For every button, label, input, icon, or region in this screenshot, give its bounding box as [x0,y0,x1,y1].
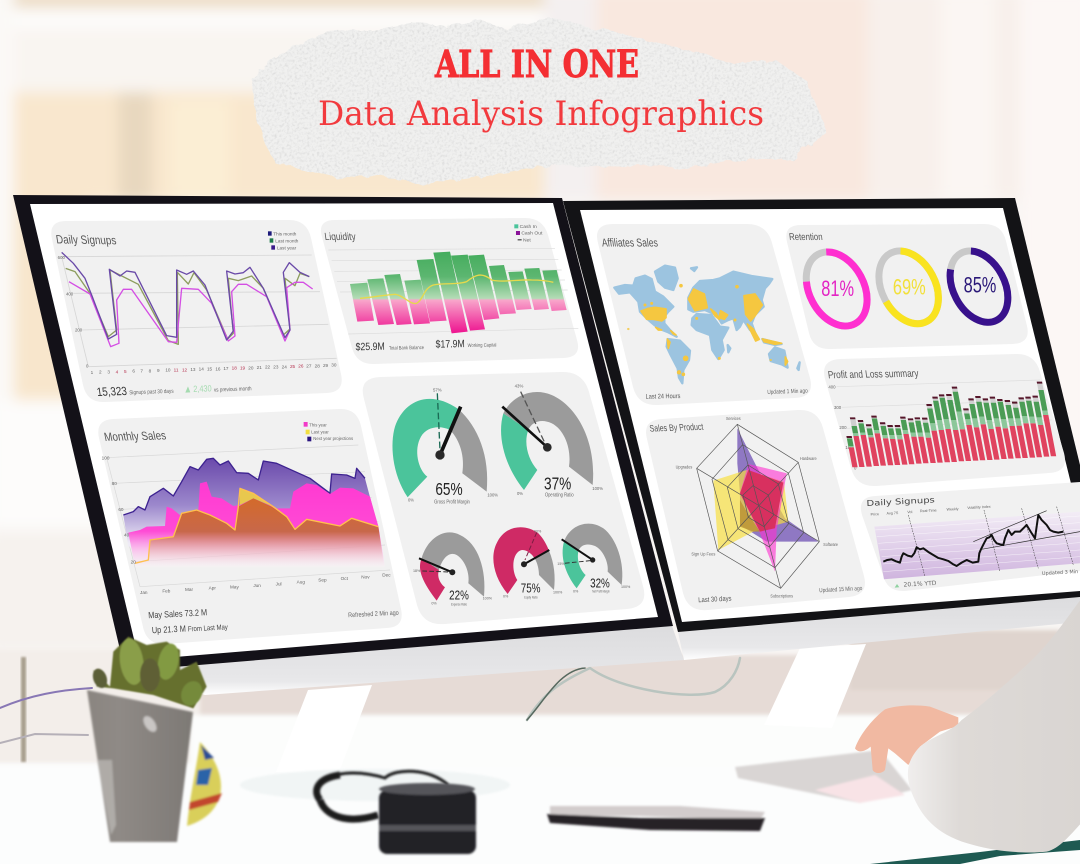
stock line chart [874,507,1080,579]
note: updated 1 min ago: Updated 1 Min ago [767,388,808,396]
area chart: monthly sales: Apr [209,586,216,591]
gauge: equity ratio [493,527,563,600]
gauge: gross profit margin: Gross Profit Margin [434,499,470,505]
line chart: daily signups: 5 [124,369,127,374]
stacked bar chart: 0 [854,465,857,470]
area chart: monthly sales: Sep [318,578,327,583]
legend: monthly sales [304,422,354,441]
line chart: daily signups: 3 [107,369,110,374]
title line one: ALL IN ONE [434,42,639,86]
gauge: net profit margin: Net Profit Margin [592,590,610,594]
line chart: daily signups: 13 [190,367,196,372]
donut: 81 percent: 81% [821,277,854,302]
line chart: daily signups: 16 [215,366,221,371]
line chart: daily signups: 2 [99,370,102,375]
panel: profit and loss summary [824,354,1065,486]
gauge: operating ratio [501,384,603,499]
phone [547,806,765,831]
line chart: daily signups: 27 [306,363,312,368]
stat: working capital [436,338,496,351]
stat: total bank balance [356,341,424,354]
gauge: equity ratio: 0% [503,595,509,599]
gauge: gross profit margin: 65% [435,480,463,499]
left monitor chin [125,626,684,695]
gauge: operating ratio: 100% [592,486,603,492]
legend: monthly sales: Last year [311,429,329,435]
gauge: operating ratio: 37% [544,475,571,494]
note: updated 3 min: Updated 3 Min [1042,569,1078,577]
area chart: monthly sales: Feb [162,589,171,594]
panel: gauges [363,372,644,624]
line chart: daily signups: 7 [140,368,143,373]
glasses [317,771,448,819]
stacked bar chart [828,380,1056,470]
line chart: daily signups: 12 [182,367,188,372]
header labels: Avg 7S [886,511,899,516]
legend: liquidity: Cash In [520,224,537,230]
header labels: Volatility Index [967,505,991,510]
area chart: monthly sales: Aug [297,579,305,584]
stat: signups past 30 days: 2,430 [193,384,212,394]
area chart: monthly sales: Dec [382,573,391,578]
keyboard [735,750,912,803]
line chart: daily signups: 6 [132,369,135,374]
monitor stands [240,644,866,801]
arm sleeve [908,598,1080,853]
panel: affiliates sales [597,224,811,405]
area chart: monthly sales: 20 [131,559,136,564]
line chart: daily signups: 29 [323,363,329,368]
heading: daily signups: Daily Signups [55,234,118,248]
cables [0,658,740,743]
line chart: daily signups: 8 [149,368,152,373]
gauge: net profit margin [557,524,631,594]
right monitor screen [580,208,1080,622]
stat: may sales [148,608,229,635]
donut: 85 percent: 85% [964,273,996,298]
line chart: daily signups: 9 [157,368,160,373]
line chart: daily signups: 0 [86,364,89,369]
area chart: monthly sales: May [230,584,239,589]
gauge: expense ratio: 100% [483,596,493,600]
gauge: operating ratio: 0% [517,491,523,497]
area chart: monthly sales: Nov [361,574,370,579]
header labels: Price [871,512,879,517]
legend: liquidity [514,224,543,243]
gauge: gross profit margin: 0% [408,498,414,504]
radar chart: Subscriptions [770,593,793,598]
header labels [871,505,991,517]
panel: sales by product [646,410,865,610]
panel: monthly sales [98,409,402,644]
panel: liquidity [321,218,578,364]
line chart: daily signups: 23 [273,364,279,369]
line chart: daily signups: 600 [58,255,65,260]
line chart: daily signups: 4 [116,369,119,374]
line chart: daily signups: 20 [248,365,254,370]
heading: affiliates sales: Affiliates Sales [601,238,659,250]
heading: profit and loss summary: Profit and Loss summary [827,368,920,382]
right monitor bezel [563,198,1080,632]
gauge: operating ratio: 43% [515,384,524,390]
line chart: daily signups: 19 [240,365,246,370]
stat: total bank balance: Total Bank Balance [389,345,424,351]
legend: daily signups: Last month [275,238,299,243]
line chart: daily signups: 28 [315,363,320,368]
desk edge [870,840,1080,864]
left monitor bezel [13,195,673,671]
stat: signups past 30 days: Signups past 30 days [129,388,174,396]
legend: monthly sales: Next year projections [313,436,354,441]
line chart: daily signups: 18 [232,366,237,371]
line chart: daily signups: 22 [265,365,271,370]
note: refreshed: Refreshed 2 Min ago [348,609,400,619]
stat: may sales: Up 21.3 M From Last May [152,622,229,635]
torn paper title banner [251,20,826,185]
gauge: net profit margin: 0% [573,589,579,593]
note: last 24 hours: Last 24 Hours [646,393,680,401]
radar chart [676,416,838,598]
line chart: daily signups [58,252,337,375]
heading: sales by product: Sales By Product [649,421,705,434]
area chart: monthly sales: Jan [140,590,148,595]
stat: signups past 30 days: 15,323 [96,385,128,399]
line chart: daily signups: 21 [257,365,262,370]
line chart: daily signups: 11 [174,367,179,372]
gauge: expense ratio [413,532,493,606]
gauge: net profit margin: 100% [621,585,631,589]
gauge: expense ratio: Expense Ratio [451,602,467,606]
radar chart: Hardware [800,456,817,461]
hand [855,705,958,773]
gauge: gross profit margin [392,387,498,505]
legend: liquidity: Net [523,237,531,243]
panel: retention [786,224,1028,349]
stat: year to date: 20.1% YTD [903,580,937,589]
line chart: daily signups: 24 [282,364,287,369]
note: last 30 days: Last 30 days [698,595,732,604]
plant: pot [87,690,193,842]
line chart: daily signups: 25 [290,364,296,369]
gauge: expense ratio: 18% [413,569,421,573]
stat: total bank balance: $25.9M [356,341,385,354]
radar chart: Sign Up Fees [691,551,715,556]
stat: may sales: May Sales 73.2 M [148,608,207,620]
panel: daily signups stock chart [861,482,1080,591]
line chart: daily signups: 200 [75,327,83,332]
stacked bar chart: 200 [839,425,847,430]
gauge: operating ratio: Operating Ratio [545,493,574,499]
radar chart: Software [823,542,838,547]
legend: daily signups: This month [273,231,297,236]
stat: signups past 30 days [96,384,252,399]
area chart: monthly sales: 100 [102,455,110,460]
legend: daily signups: Last year [277,245,297,250]
heading: retention: Retention [788,231,823,242]
stat: working capital: $17.9M [436,338,465,351]
stacked bar chart: 100 [845,445,853,450]
lens cylinder [379,783,476,854]
area chart: monthly sales: Oct [341,576,349,581]
gauge: expense ratio: 22% [449,589,469,603]
donut: 69 percent: 69% [893,275,926,300]
gauge: gross profit margin: 57% [433,387,442,393]
left monitor screen [30,203,658,660]
radar chart: Services [726,416,741,421]
radar chart: Upgrades [676,464,692,469]
area chart: monthly sales: Jul [276,581,282,586]
gauge: net profit margin: 15% [557,562,565,566]
area chart: monthly sales: 60 [118,507,124,512]
stacked bar chart: 400 [828,384,836,389]
line chart: daily signups: 17 [223,366,229,371]
patterned bag [187,742,222,826]
gauge: equity ratio: 75% [521,583,540,596]
panel: daily signups [51,220,342,402]
header labels: Vol [907,510,913,514]
right monitor chin [678,597,1080,660]
gauge: equity ratio: Equity Ratio [524,596,538,600]
gauge: equity ratio: 60% [534,530,542,534]
world map [614,266,800,383]
line chart: daily signups: 400 [66,291,74,296]
line chart: daily signups: 26 [298,364,304,369]
legend: liquidity: Cash Out [521,231,543,237]
title line two: Data Analysis Infographics [318,94,764,134]
area chart: monthly sales [102,445,391,595]
gauge: expense ratio: 0% [431,601,437,605]
line chart: daily signups: 1 [91,370,94,375]
line chart: daily signups: 10 [165,368,171,373]
stat: working capital: Working Capital [468,342,496,348]
header labels: Real-Time [920,508,937,513]
line chart: daily signups: 14 [199,367,204,372]
donut: 69 percent [867,241,950,334]
header labels: Weekly [946,507,959,512]
donut: 85 percent [938,241,1019,332]
bar chart: liquidity [328,248,578,334]
gauge: net profit margin: 32% [590,578,610,591]
donut: 81 percent [794,241,879,337]
stacked bar chart: 300 [834,405,842,410]
plant: leaves [90,637,207,709]
area chart: monthly sales: 80 [112,481,117,486]
area chart: monthly sales: Jun [253,583,261,588]
gauge: equity ratio: 100% [553,591,563,595]
gauge: gross profit margin: 100% [487,493,498,499]
heading: monthly sales: Monthly Sales [103,430,168,444]
legend: monthly sales: This year [309,422,327,427]
legend: daily signups [268,231,299,250]
line chart: daily signups: 15 [207,366,213,371]
heading: liquidity: Liquidity [324,231,357,243]
area chart: monthly sales: Mar [185,587,193,592]
area chart: monthly sales: 40 [124,533,130,538]
heading: daily signups wide: Daily Signups [866,495,935,508]
line chart: daily signups: 30 [331,363,337,368]
stat: signups past 30 days: vs previous month [214,386,252,394]
note: updated 15 min ago: Updated 15 Min ago [819,586,863,595]
